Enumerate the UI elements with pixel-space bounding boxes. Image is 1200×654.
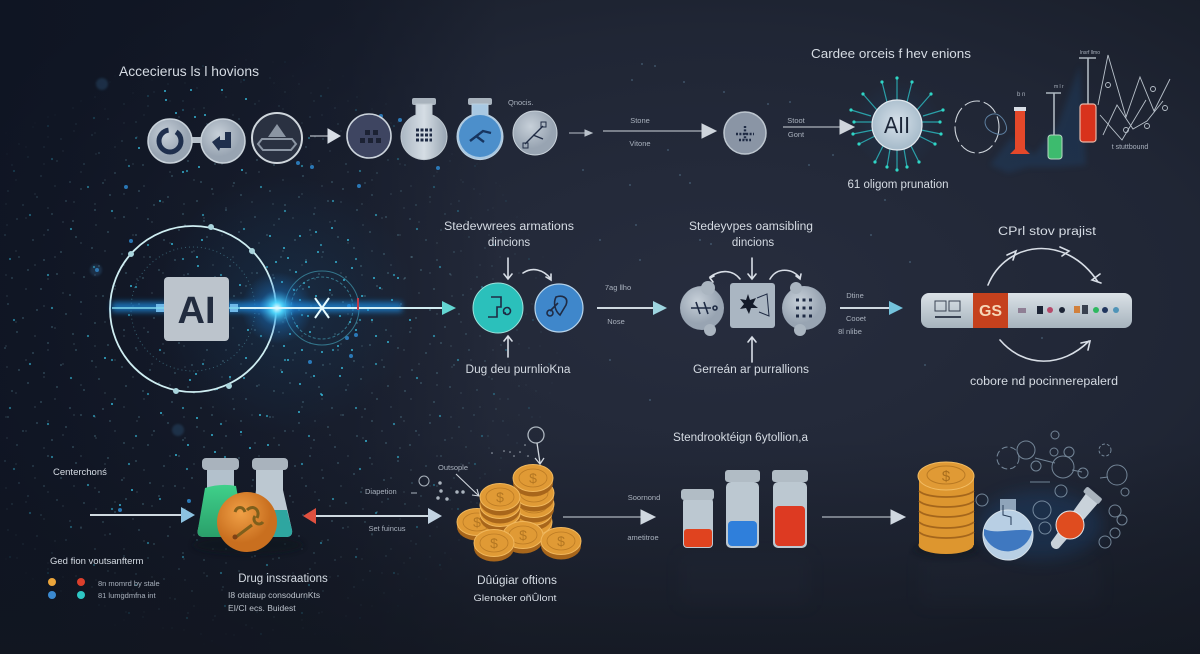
label: Outsople	[438, 463, 468, 472]
cycle arrow bottom	[1000, 340, 1090, 361]
section: coin stack and flasks	[914, 431, 1129, 560]
arrow	[597, 307, 653, 309]
heading: top right: Cardee orceis f hev enions	[811, 46, 972, 61]
arrow up	[504, 336, 512, 357]
heading: Stedeyvpes oamsibling	[689, 221, 813, 233]
cycle arrow top	[988, 247, 1101, 285]
label: Qnocis.	[508, 98, 533, 107]
arrow	[822, 510, 905, 524]
section: middle step two	[680, 221, 826, 376]
caption block: I8 otataup consodurnKts	[228, 590, 320, 600]
chart: test tubes and lines	[955, 50, 1170, 173]
chart: test tubes and lines: m l r	[1054, 84, 1064, 90]
label: 7ag llho	[605, 283, 631, 292]
label: Diapetion	[365, 487, 397, 496]
section: bottom left	[48, 458, 442, 613]
section: top left pipeline	[119, 64, 592, 163]
label: Soornond	[628, 493, 660, 502]
arrowhead	[181, 507, 195, 523]
chart: test tubes and lines: lnsrf llmo	[1080, 50, 1100, 56]
AI tile	[164, 277, 229, 341]
label: Stoot	[787, 116, 806, 125]
icon: hub circle	[724, 112, 766, 154]
test tube	[1051, 486, 1103, 549]
curved arrows	[710, 270, 801, 282]
label: Stone	[630, 116, 650, 125]
coin pile: $	[490, 535, 498, 551]
section: AI core	[110, 226, 456, 392]
icon: grey flask	[401, 98, 447, 160]
icon: square tile	[730, 283, 775, 328]
icon: teal circle	[473, 283, 523, 333]
arrowhead	[653, 301, 667, 315]
caption block: EI/CI ecs. Buidest	[228, 603, 296, 613]
caption block: Drug inssraations	[238, 573, 328, 585]
arrow	[310, 129, 340, 143]
chart: test tubes and lines: b n	[1017, 92, 1025, 98]
beam and flare	[112, 272, 456, 344]
arrow	[563, 510, 655, 524]
caption: Dug deu purnlioKna	[466, 364, 571, 376]
caption: Gerreán ar purrallions	[693, 364, 809, 376]
icon: left blob	[680, 281, 724, 336]
heading: Stendrooktéign 6ytollion,a	[673, 432, 809, 444]
coin pile	[457, 464, 581, 562]
bottle: red small	[681, 489, 714, 548]
coin pile: $	[529, 470, 537, 486]
heading: CPrl stov prajist	[998, 226, 1097, 238]
particle field	[4, 60, 1043, 642]
curved arrow	[523, 270, 551, 280]
decorative molecule and pointer	[411, 427, 544, 499]
label: Centerchonś	[53, 467, 107, 478]
section: middle step one	[444, 221, 667, 376]
icon: molecule circle	[513, 111, 557, 155]
section: GS bar	[838, 226, 1132, 388]
heading line two: dincions	[488, 237, 530, 249]
small arrow	[569, 130, 592, 136]
label: Nose	[607, 317, 625, 326]
large ring	[110, 226, 276, 392]
icon: AI neural circle	[851, 78, 943, 170]
icon: dark dots circle	[347, 114, 391, 158]
icon: flasks with orange badge	[193, 458, 303, 554]
arrow	[603, 124, 716, 138]
molecule rings	[976, 431, 1129, 548]
status bar	[921, 293, 1132, 328]
legend: 8n momrd by stale	[98, 579, 160, 588]
caption: Dûúgiar oftions	[477, 575, 557, 587]
glow	[978, 491, 1102, 559]
heading: Stedevwrees armations	[444, 221, 574, 233]
arrow down	[748, 258, 756, 279]
AI tile: AI	[178, 290, 216, 332]
icon: right blob	[782, 282, 826, 336]
label: Vitone	[629, 139, 651, 148]
legend: 81 lumgdmfna int	[98, 591, 156, 600]
arrow	[783, 120, 854, 134]
label: Set fuincus	[368, 524, 406, 533]
coin pile: $	[473, 514, 481, 530]
label: Gont	[788, 130, 805, 139]
bottle: blue	[725, 470, 760, 548]
coin stack	[914, 462, 978, 557]
label: ametitroe	[627, 533, 659, 542]
label: Cooet	[846, 314, 867, 323]
caption block	[228, 573, 328, 613]
icon: blue flask	[457, 98, 503, 160]
secondary ring	[285, 271, 359, 345]
arrow	[840, 307, 890, 309]
coin pile: $	[557, 533, 565, 549]
section: coins pile	[411, 427, 660, 604]
caption: cobore nd pocinnerepalerd	[970, 376, 1118, 388]
arrowhead	[889, 301, 903, 315]
icon: blue circle	[535, 284, 583, 332]
icon: connected circles	[148, 113, 302, 163]
section: top right pipeline	[603, 46, 1170, 191]
heading line two: dincions	[732, 237, 774, 249]
arrow down	[504, 258, 512, 279]
caption: 61 oligom prunation	[847, 179, 949, 191]
round flask	[983, 499, 1033, 560]
arrow	[90, 514, 182, 516]
double arrow	[303, 508, 442, 524]
caption line two: Glenoker oñÛlont	[474, 593, 557, 604]
status bar: GS	[979, 303, 1002, 320]
legend: Ged fion voutsanfterm	[50, 556, 144, 567]
coin pile: $	[496, 489, 504, 505]
label: Dtine	[846, 291, 864, 300]
chart: test tubes and lines: t stuttbound	[1112, 144, 1148, 151]
heading: top left: Accecierus ls l hovions	[119, 64, 259, 79]
icon: AI neural circle: AII	[884, 112, 910, 138]
arrow up	[748, 337, 756, 362]
label: 8l nlibe	[838, 327, 862, 336]
coin pile: $	[519, 527, 527, 543]
legend	[48, 556, 160, 600]
coin stack: $	[942, 468, 951, 485]
bottle: red tall	[772, 470, 808, 548]
section: bottles	[673, 432, 905, 548]
